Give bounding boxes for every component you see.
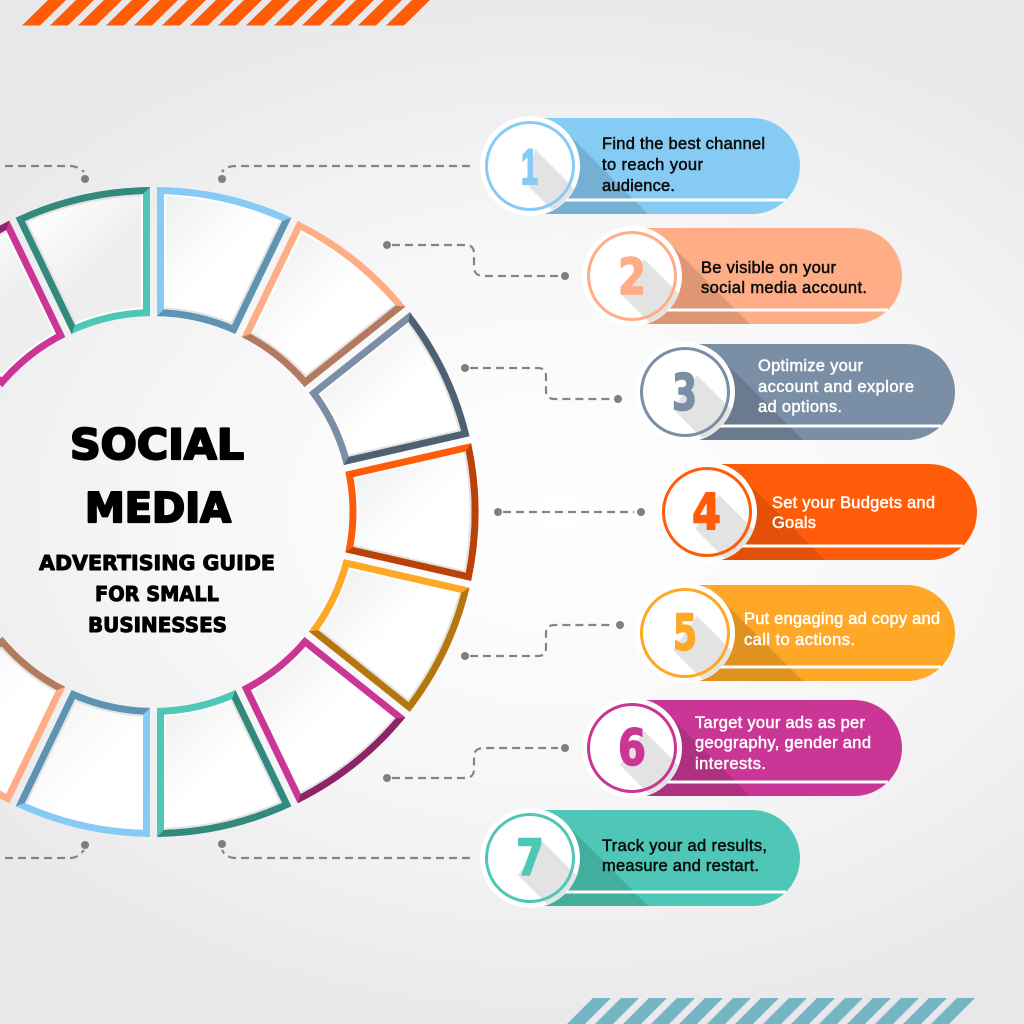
- step 4 text: Set your Budgets and: [772, 494, 935, 512]
- title line: media: MEDIA: [85, 484, 231, 532]
- wheel segment: orange: [345, 443, 478, 581]
- wheel segment: magenta bottom: [219, 619, 410, 809]
- step 5 pill: [640, 585, 955, 681]
- wheel segment: blue bottom: [14, 684, 178, 844]
- step 6 text: Target your ads as per: [695, 714, 866, 732]
- step 3 text: account and explore: [758, 378, 914, 396]
- step 7 text: Track your ad results,: [602, 837, 767, 855]
- dashed connectors: [5, 166, 634, 858]
- number 4: 4: [692, 483, 721, 541]
- step 1 text: audience.: [602, 177, 675, 195]
- wheel segment: peach top: [219, 215, 410, 405]
- step 1 text: [602, 135, 765, 195]
- step 5 text: [744, 610, 940, 649]
- step 1 text: Find the best channel: [602, 135, 765, 153]
- number 7: 7: [516, 829, 544, 887]
- step 6 pill: [587, 700, 902, 798]
- wheel segment: magenta top: [0, 215, 88, 405]
- step 5 text: call to actions.: [744, 631, 855, 649]
- number 1: 1: [521, 139, 538, 195]
- title line: social: SOCIAL: [70, 420, 244, 469]
- step 7 text: measure and restart.: [602, 857, 759, 875]
- step 2 text: Be visible on your: [701, 259, 836, 277]
- step 3 text: Optimize your: [758, 357, 864, 375]
- number 2: 2: [618, 248, 646, 306]
- subtitle line 2: FOR SMALL: [95, 582, 219, 606]
- step 2 pill: [587, 226, 902, 324]
- step 7 text: [602, 837, 767, 875]
- orange stripes top: [22, 0, 430, 26]
- step 4 pill: [662, 464, 977, 560]
- step 2 text: [701, 259, 867, 297]
- step 6 text: interests.: [695, 755, 766, 773]
- subtitle line 3: BUSINESSES: [88, 613, 227, 637]
- step 7 pill: [480, 808, 800, 908]
- step 6 text: geography, gender and: [695, 734, 871, 752]
- step 4 text: Goals: [772, 514, 816, 532]
- teal stripes bottom: [567, 998, 975, 1024]
- segmented wheel: [0, 180, 478, 844]
- step 3 text: [758, 357, 914, 416]
- step 3 text: ad options.: [758, 398, 842, 416]
- step 5 text: Put engaging ad copy and: [744, 610, 940, 628]
- step 3 pill: [640, 344, 955, 440]
- subtitle line 1: ADVERTISING GUIDE: [39, 551, 275, 575]
- wheel segment: slate: [296, 309, 476, 491]
- wheel segment: teal bottom: [129, 684, 293, 844]
- wheel segment: yellow: [296, 533, 476, 715]
- title: [39, 420, 275, 637]
- step 1 pill: [480, 116, 800, 216]
- step 1 text: to reach your: [602, 156, 704, 174]
- wheel segment: teal top: [14, 180, 178, 340]
- wheel segment: blue top: [129, 180, 293, 340]
- step 2 text: social media account.: [701, 279, 867, 297]
- step 6 text: [695, 714, 871, 773]
- number 5: 5: [673, 604, 697, 662]
- step 4 text: [772, 494, 935, 532]
- number 3: 3: [672, 364, 697, 422]
- connector dots: [81, 175, 645, 849]
- wheel segment: peach bottom: [0, 619, 88, 809]
- number 6: 6: [618, 719, 646, 777]
